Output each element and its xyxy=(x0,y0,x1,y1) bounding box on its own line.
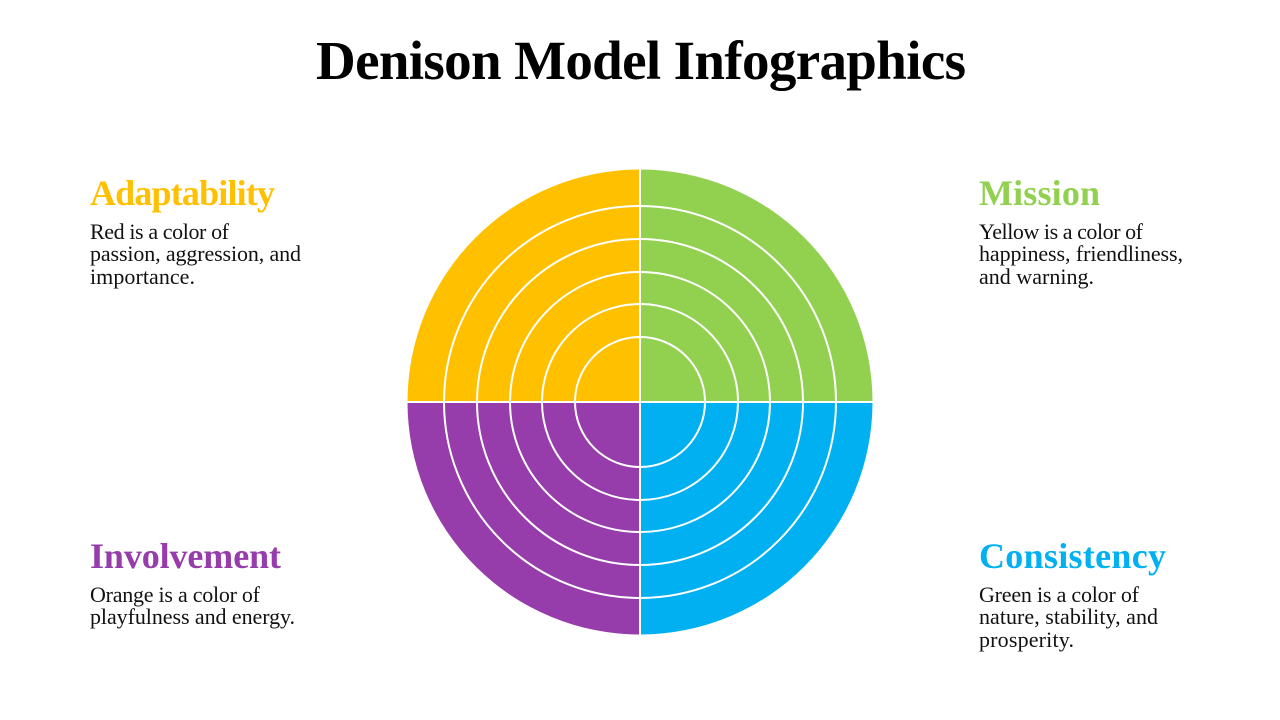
text block: consistency: nature, stability, and xyxy=(979,604,1158,629)
quadrant: involvement xyxy=(408,402,640,634)
text block: adaptability: passion, aggression, and xyxy=(90,241,301,266)
heading: involvement: Involvement xyxy=(90,536,281,576)
quadrant: adaptability xyxy=(408,170,640,402)
text block: mission: and warning. xyxy=(979,264,1094,289)
ring outlines xyxy=(406,168,874,636)
text block: adaptability: importance. xyxy=(90,264,195,289)
text block: consistency: prosperity. xyxy=(979,627,1074,652)
heading: adaptability: Adaptability xyxy=(90,173,275,213)
panel: involvement xyxy=(90,536,295,629)
text block: mission: happiness, friendliness, xyxy=(979,241,1183,266)
text block: mission: Yellow is a color of xyxy=(979,219,1144,244)
text block: adaptability: Red is a color of xyxy=(90,219,230,244)
panel: adaptability xyxy=(90,173,301,289)
panel: consistency xyxy=(979,536,1166,652)
text block: consistency xyxy=(979,582,1158,652)
title: Denison Model Infographics xyxy=(316,30,966,91)
panel: mission xyxy=(979,173,1183,289)
text block: involvement xyxy=(90,582,295,629)
text block: involvement: playfulness and energy. xyxy=(90,604,295,629)
text block: consistency: Green is a color of xyxy=(979,582,1140,607)
heading: consistency: Consistency xyxy=(979,536,1166,576)
chart: concentric circle xyxy=(406,168,874,636)
text block: adaptability xyxy=(90,219,301,289)
quadrant: mission xyxy=(640,170,872,402)
quadrant: consistency xyxy=(640,402,872,634)
text block: mission xyxy=(979,219,1183,289)
text block: involvement: Orange is a color of xyxy=(90,582,261,607)
heading: mission: Mission xyxy=(979,173,1100,213)
